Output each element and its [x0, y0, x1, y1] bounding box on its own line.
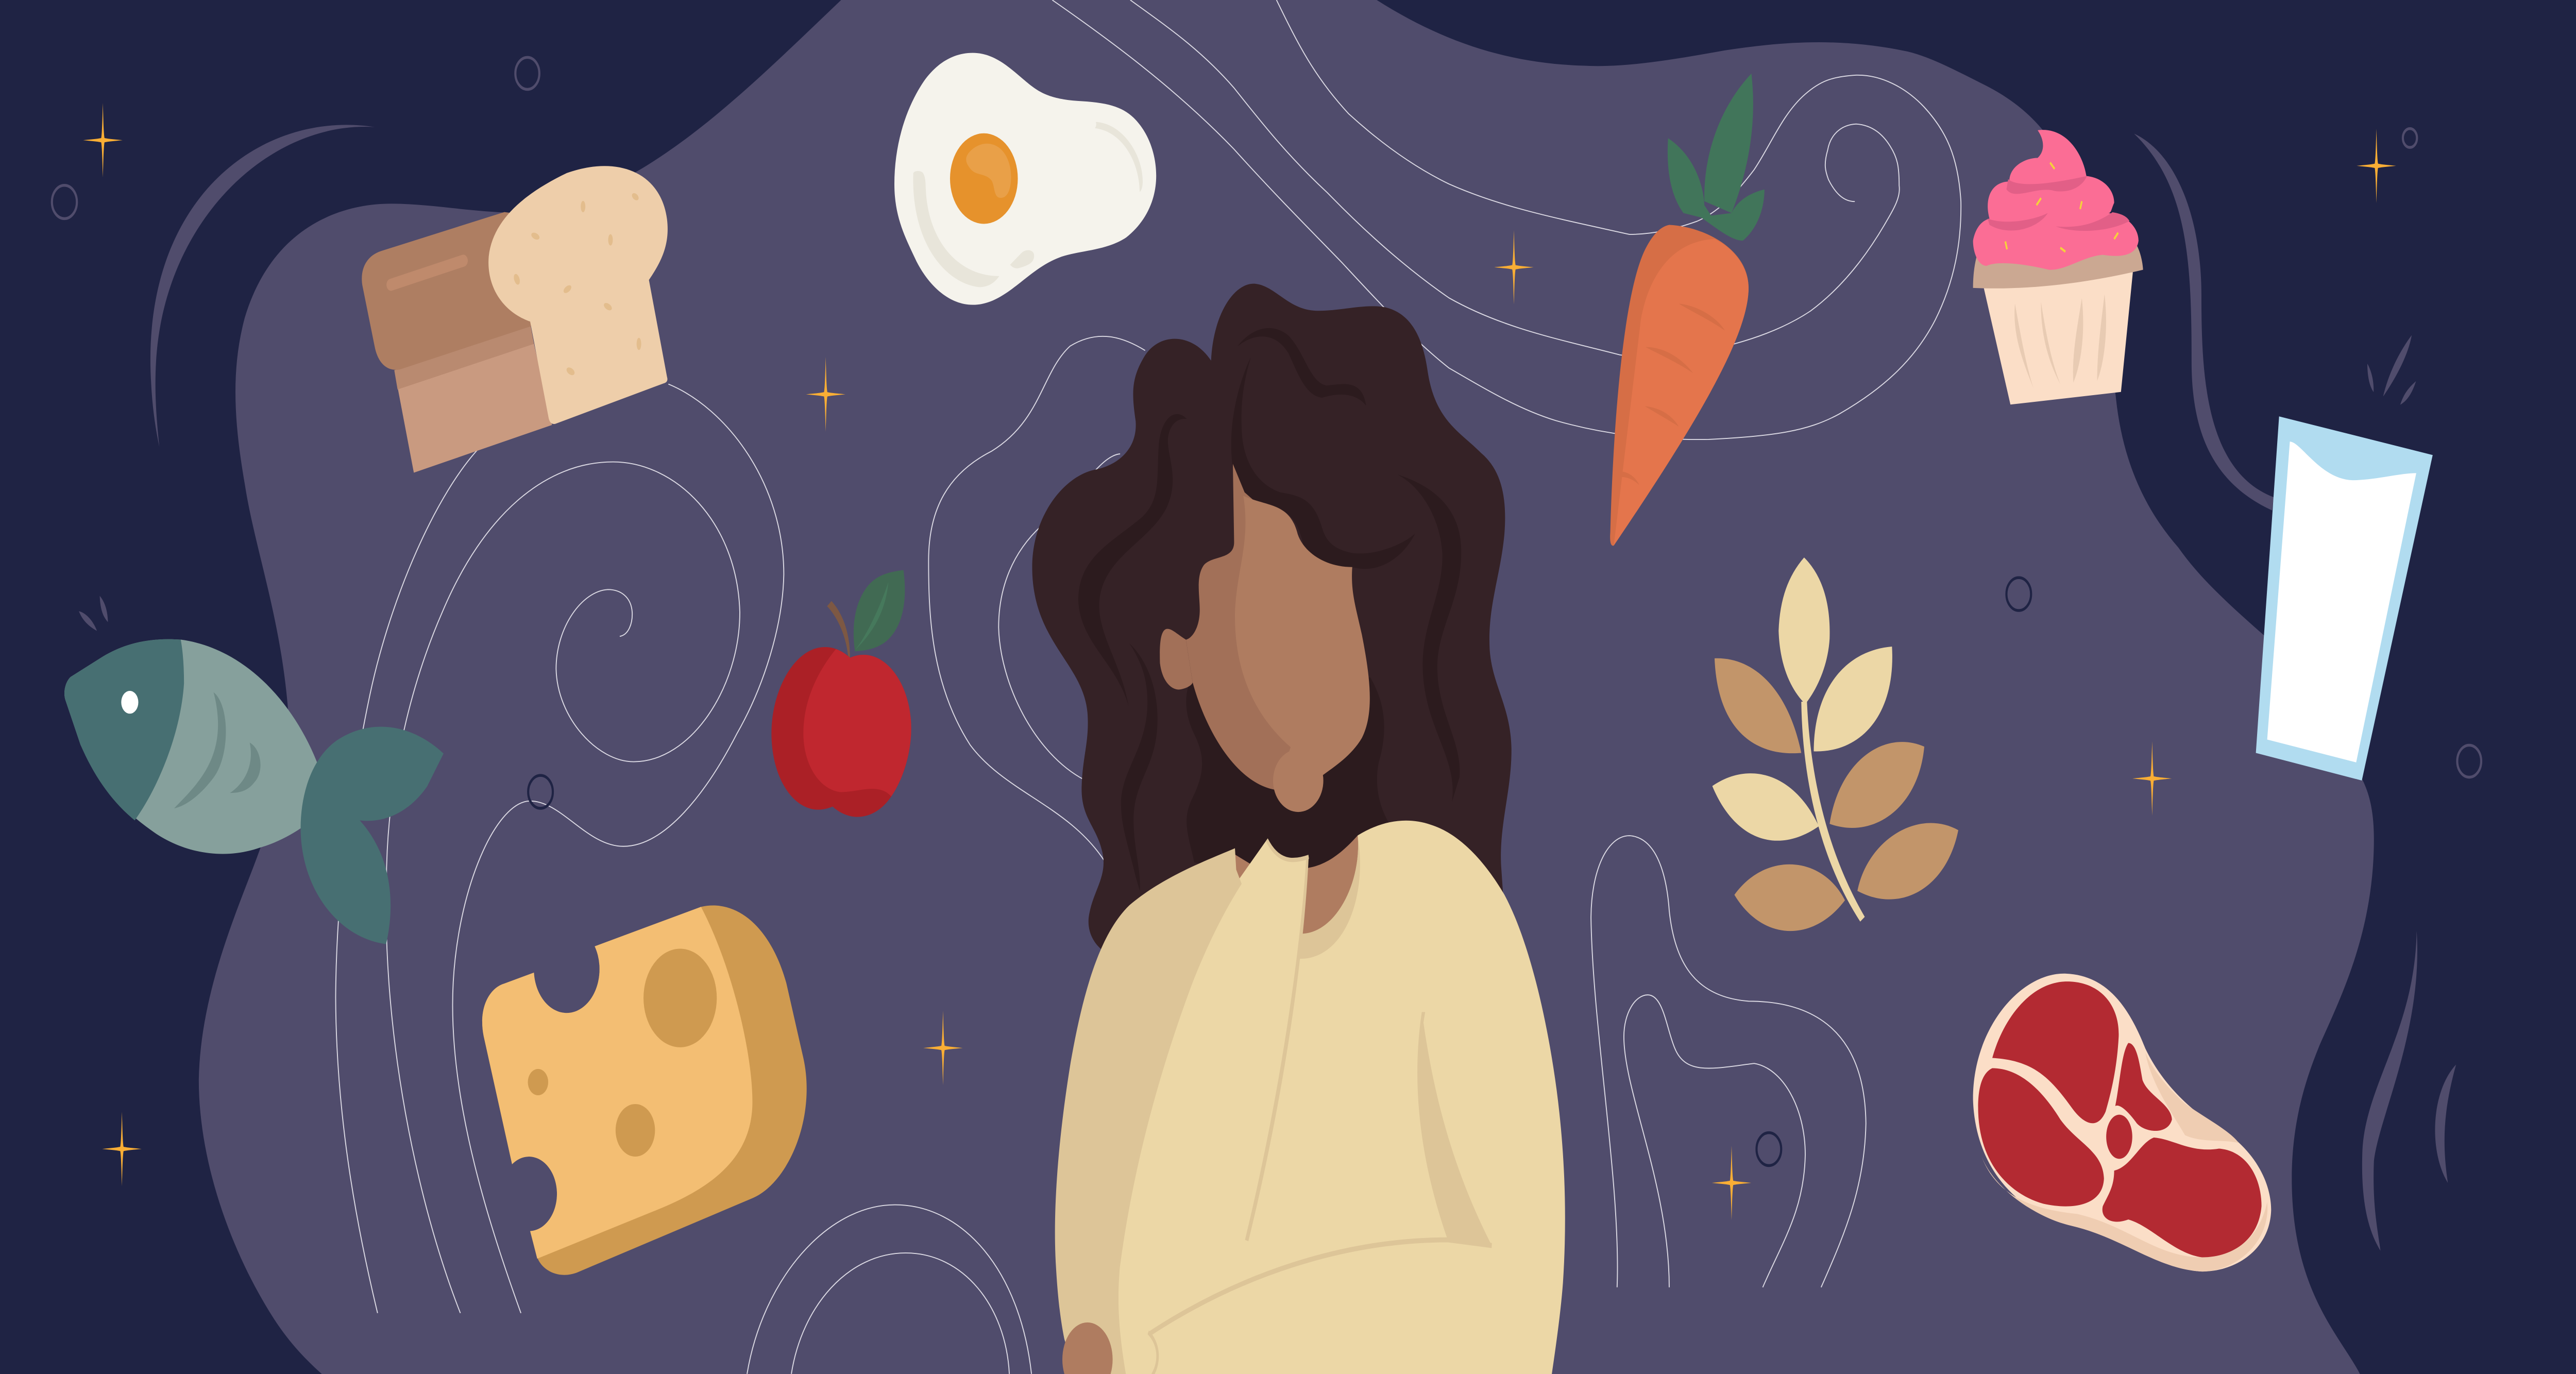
sparkle stars: [83, 103, 2396, 1220]
hair shadow behind neck: [1186, 677, 1389, 884]
icon: wheat sprig: [1713, 557, 1958, 931]
icon: steak: [1973, 974, 2271, 1271]
neck: [1234, 836, 1375, 969]
woman figure: [1032, 284, 1565, 1374]
icon: fish: [64, 639, 444, 944]
icon: apple: [771, 570, 911, 817]
icon: fried egg: [894, 53, 1156, 305]
decorative swooshes on dark background: [79, 125, 2456, 1251]
icon: carrot: [1610, 74, 1765, 546]
icon: cheese: [482, 906, 807, 1275]
icon: bread loaf: [362, 166, 668, 473]
icon: glass of milk: [2256, 416, 2433, 781]
hand: [1062, 1322, 1113, 1374]
icon: cupcake: [1973, 130, 2143, 404]
contour lines: [335, 0, 1961, 1374]
face: [1160, 464, 1370, 812]
hair strands: [1078, 328, 1461, 891]
sweater: [1055, 821, 1565, 1374]
ring outlines: [52, 57, 2481, 1165]
hair: [1032, 284, 1512, 952]
